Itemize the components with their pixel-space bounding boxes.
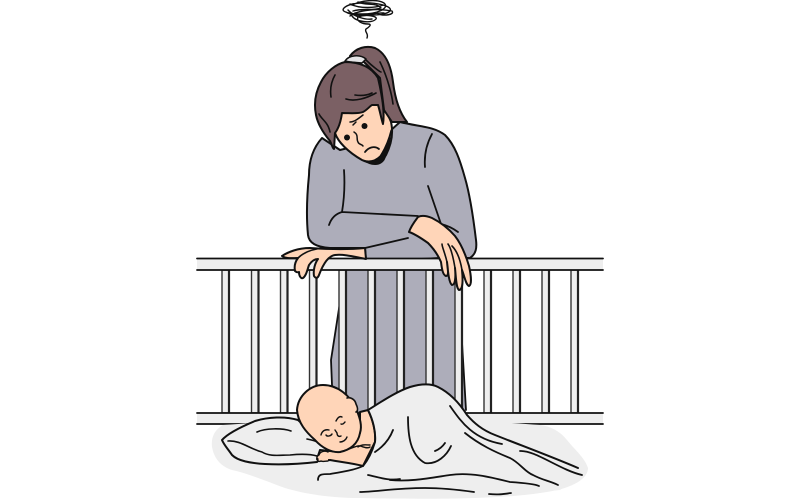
nose [354,132,363,146]
neck shadow [363,130,391,164]
mother's right hand on rail [409,216,471,290]
mother's hair [315,60,393,149]
blanket top outline [363,384,578,468]
baby's arm lines [340,445,370,452]
icon: worry scribble above head [343,1,393,38]
blanket fold lines [390,406,582,486]
crib bottom rail outline [197,413,603,424]
baby's head [297,385,361,452]
mother's left hand on rail [282,248,366,278]
crib mattress shadow [212,420,588,499]
mouth [365,147,379,152]
baby's body [317,410,375,466]
pillow [222,417,330,464]
finger lines [442,244,462,270]
crib bottom rail [197,413,603,424]
mother's ponytail [350,47,407,122]
face [335,100,392,162]
sleeve fold lines [329,134,458,248]
crib top rail [197,258,603,270]
blanket [318,384,583,498]
mother's trousers [331,268,466,412]
mother's neck and face [335,100,393,164]
mother's torso and sleeves [307,122,476,262]
baby's ear [347,398,358,412]
eyes [362,123,368,129]
mother's trouser outline [331,270,466,410]
baby [297,385,375,466]
eyebrow [350,115,363,125]
pillow crease lines [228,429,319,456]
baby's hand [317,451,328,461]
ear [381,103,393,122]
crib bars [222,270,578,413]
hair tie [345,56,366,63]
baby's face [321,417,347,442]
hair strand lines [319,60,393,132]
crib top rail outline [197,258,603,270]
